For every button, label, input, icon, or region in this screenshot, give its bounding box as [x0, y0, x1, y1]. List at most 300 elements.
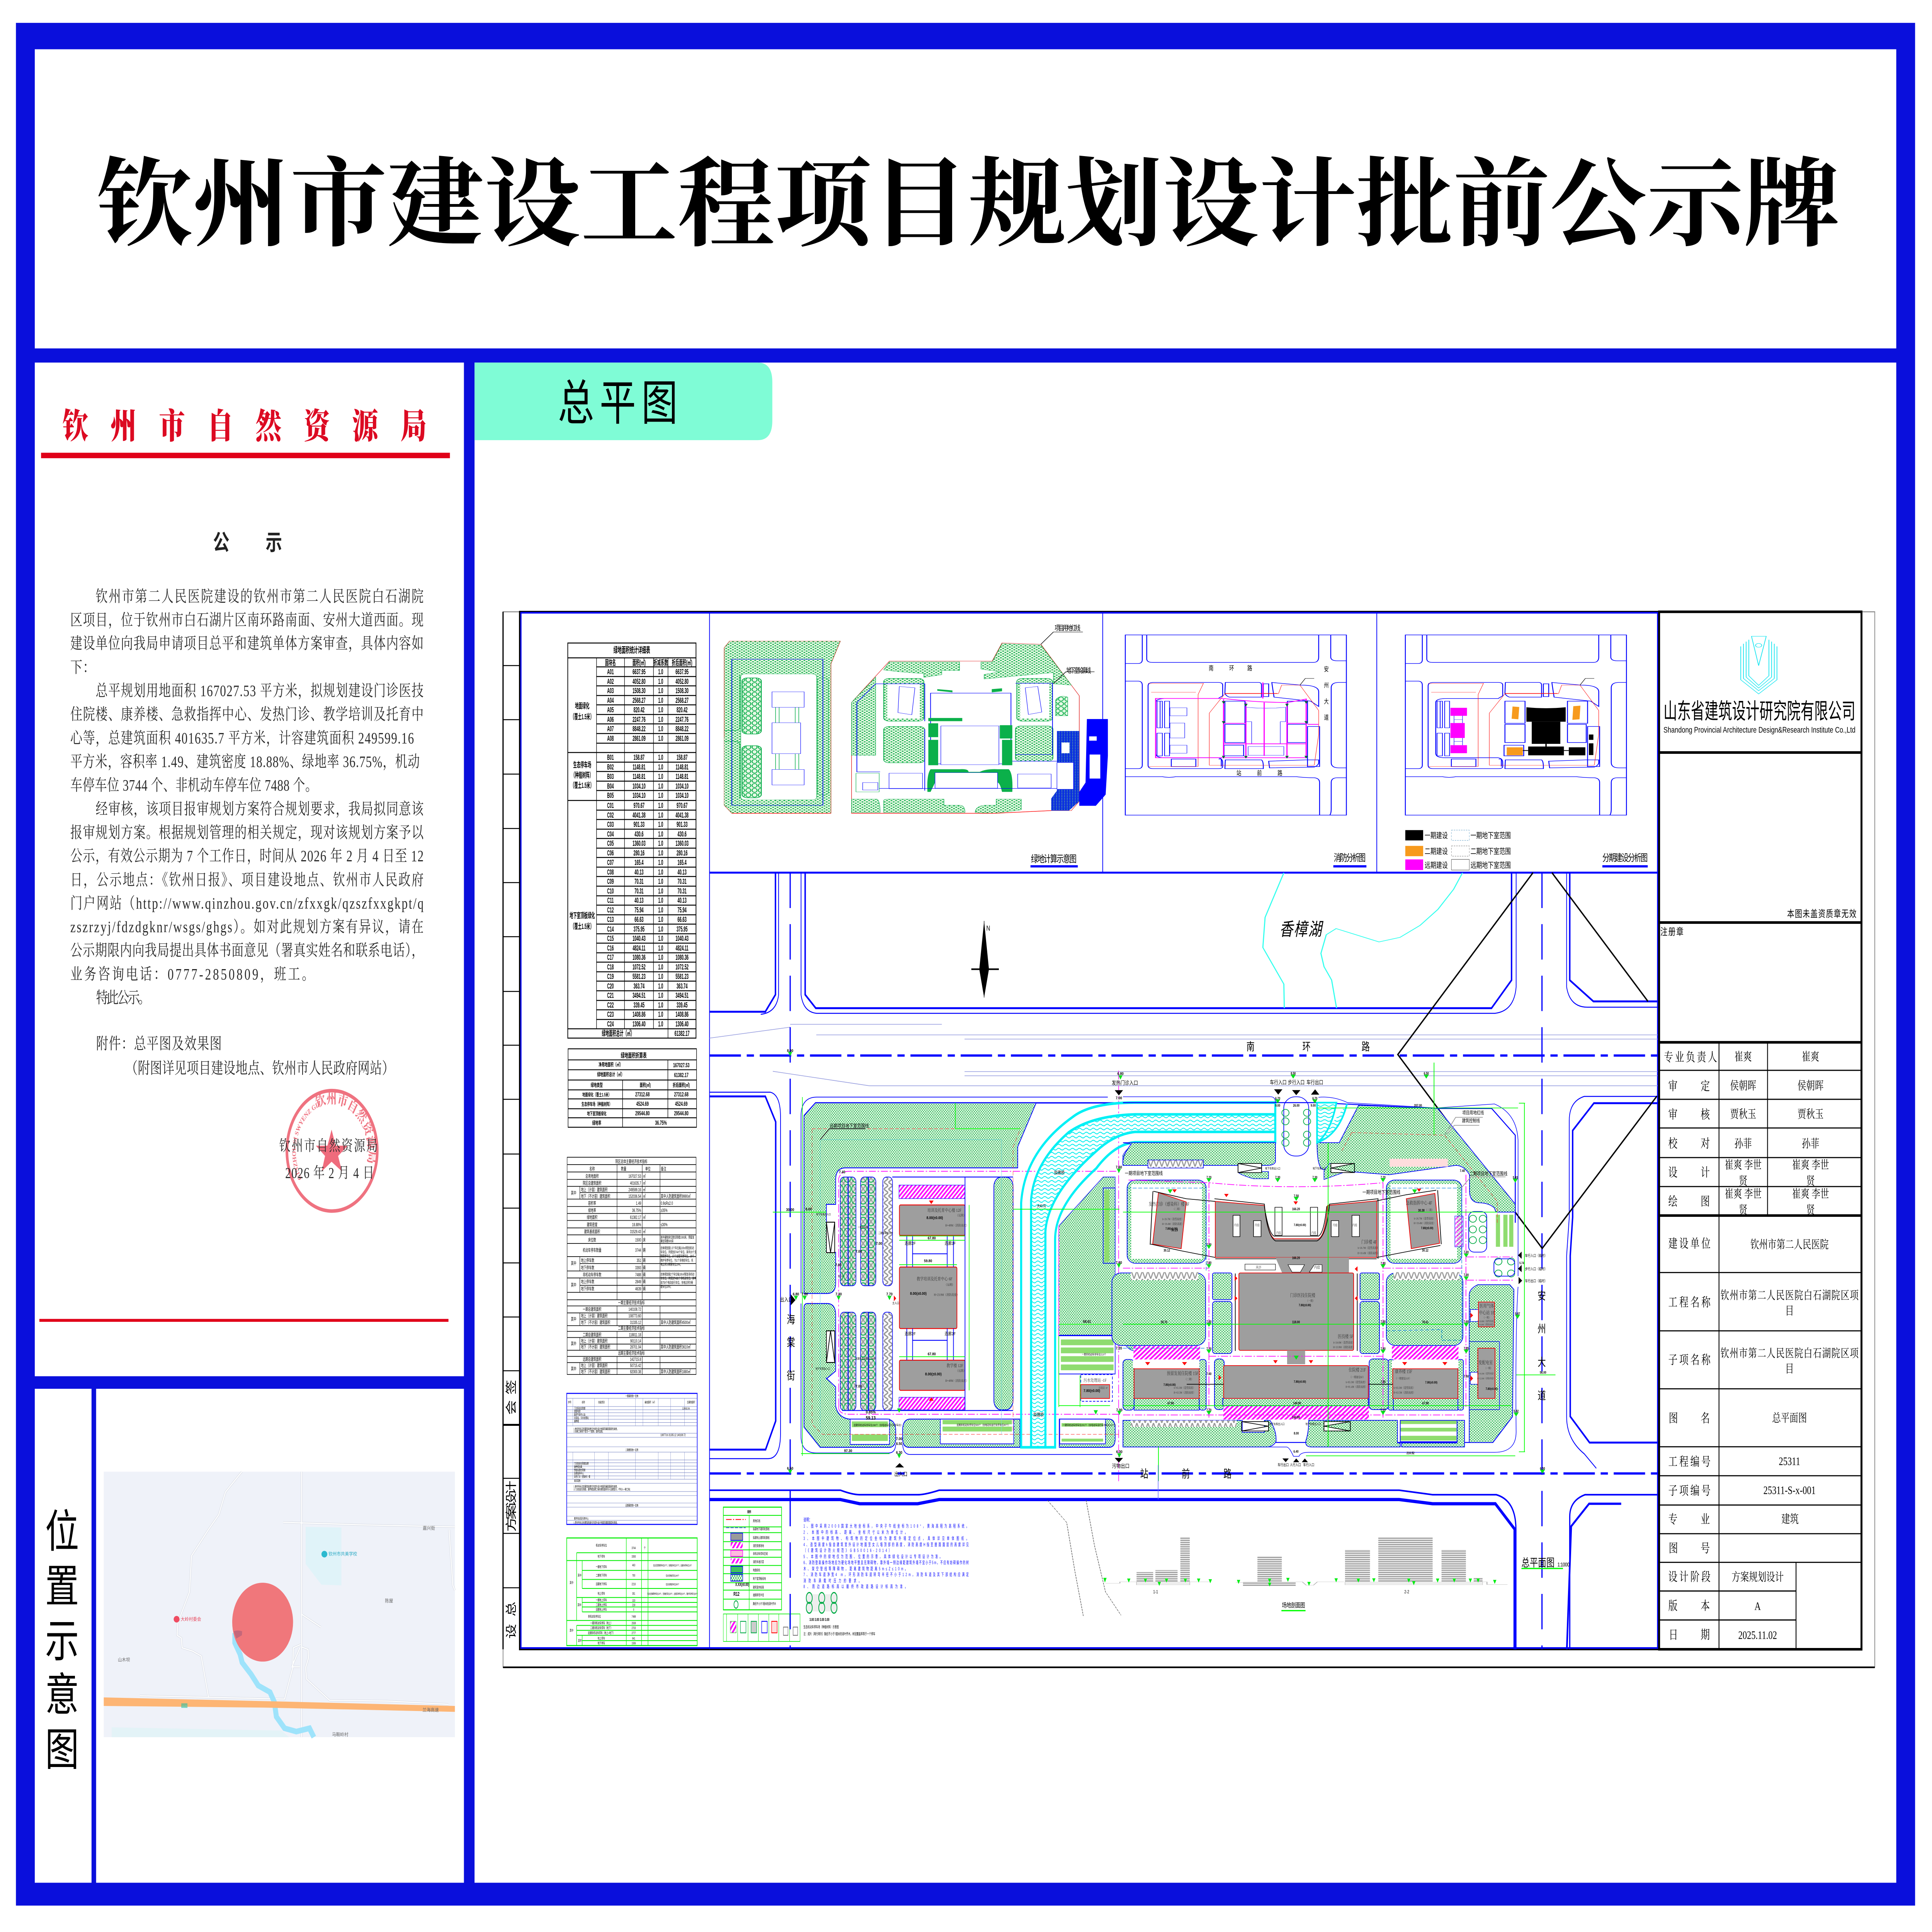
building: substation	[1478, 1348, 1495, 1398]
elevations: 7.80(±0.00)	[1083, 1389, 1100, 1393]
corridors	[842, 1177, 1013, 1410]
elevation marks east: 166.20	[1292, 1256, 1300, 1260]
entrance labels east: 车行入口	[1270, 1079, 1287, 1086]
table: technical indicators: 其中	[571, 1316, 576, 1322]
site plan: east half: 7.80(±0.00)	[1294, 1223, 1306, 1227]
plan labels: fire and phasing: 前	[1257, 770, 1262, 777]
table: technical indicators: ㎡	[643, 1214, 646, 1220]
table: green area detail: 1072.52	[633, 963, 646, 971]
title block: 贤	[1739, 1175, 1748, 1187]
section elevation marks	[1103, 1578, 1497, 1587]
phasing plan base	[1405, 635, 1626, 815]
green dimension lines	[1123, 1063, 1556, 1481]
table: green area detail: 1.0	[658, 801, 663, 810]
table: technical indicators: 31529.43	[630, 1230, 641, 1235]
table: green area detail: C17	[607, 954, 614, 962]
notes	[803, 1517, 969, 1590]
eco parking diagram: 3.00 3.00 3.00 3.00	[810, 1617, 830, 1622]
building labels east: H=63.5M（消防高度）	[1393, 1391, 1415, 1395]
building labels: 污水处理站 -1F	[1083, 1378, 1107, 1383]
table: green area conversion: 生态停车场（种植树阵）	[582, 1101, 612, 1107]
table: green area detail: 3494.51	[633, 992, 646, 1000]
table: parking: 7488	[632, 1615, 636, 1619]
building labels east: H=10.8M（造型高度）	[1477, 1320, 1495, 1323]
table: green area detail: 70.31	[677, 878, 687, 886]
map labels: 嘉兴街	[423, 1526, 435, 1531]
substation yard outline	[1469, 1342, 1500, 1410]
elevation marks east: 7.30	[1312, 1175, 1318, 1179]
building labels east: （二期）	[1185, 1377, 1193, 1381]
table: green area detail: C21	[607, 992, 614, 1000]
table: parking: 一期地上停车	[596, 1598, 607, 1602]
table: green area detail: 1.0	[658, 1020, 663, 1029]
registration stamp label: 注册章	[1660, 926, 1684, 937]
north arrow	[971, 921, 999, 998]
dashed stream lines	[1047, 1500, 1121, 1616]
table: parking: 1936	[632, 1642, 636, 1645]
entrance labels east: 人行入口	[1290, 1463, 1301, 1467]
elevation marks east: 7.50	[1381, 1380, 1386, 1384]
building labels east: 中心站 1F	[1479, 1310, 1495, 1316]
elevations: 7.00	[876, 1242, 882, 1246]
table: green area conversion: 61382.17	[674, 1071, 689, 1078]
plan caption: green calc	[1031, 624, 1091, 867]
table: green area detail: 1148.81	[633, 763, 645, 772]
blue basement line	[1123, 1188, 1462, 1348]
table: green area detail: C05	[607, 840, 614, 848]
site plan: west half: 出入口	[838, 1274, 844, 1278]
table: technical indicators: 167027.53	[629, 1174, 641, 1179]
table: green area detail: 375.95	[634, 925, 645, 934]
table: technical indicators: 61382.17	[630, 1215, 641, 1220]
notice body text: zszrzyj/fdzdgknr/wsgs/ghgs）。如对此规划方案有异议，请在	[70, 918, 423, 936]
building: teaching block	[900, 1360, 965, 1390]
building labels east: （一期）	[1485, 1366, 1492, 1370]
table: technical indicators: 其中	[571, 1260, 576, 1266]
elevations	[786, 1049, 1124, 1471]
table: green area detail: A06	[607, 716, 614, 724]
notice body text: 钦州市第二人民医院建设的钦州市第二人民医院白石湖院	[96, 587, 423, 605]
elevations: 7.40	[839, 1170, 845, 1175]
entrances and labels: 拟建桥	[1033, 1412, 1044, 1418]
table: green area detail: 1034.10	[675, 791, 689, 800]
table: green area detail: 970.67	[677, 801, 687, 810]
entrance labels east: 一期项目地下室范围线	[1125, 1170, 1163, 1176]
road names: 路	[1223, 1468, 1232, 1480]
road names: 路	[1362, 1041, 1370, 1053]
table: green area detail: C14	[607, 925, 614, 934]
elevations: 58.61	[1083, 1320, 1091, 1324]
building labels east: 内庭	[1333, 1223, 1338, 1227]
notice body text: 总平规划用地面积 167027.53 平方米，拟规划建设门诊医技	[96, 682, 423, 700]
elevation marks east: 118.00	[1292, 1320, 1300, 1324]
table: green area detail: C10	[607, 887, 614, 896]
table: green area detail: 165.4	[677, 859, 687, 867]
site plan: west half: 远期非机动车停车位288个（含电动车自行车停车位）	[854, 1423, 903, 1427]
table: green area detail: 1.0	[658, 992, 663, 1000]
table: technical indicators: 249599.16	[629, 1187, 641, 1193]
entrance labels east: 车行出口	[1278, 1463, 1289, 1467]
table: parking: 其中	[578, 1639, 582, 1643]
building: gas station	[1478, 1302, 1495, 1327]
table: green area detail: A05	[607, 706, 614, 714]
building labels east: 急救指挥中心 4F	[1406, 1200, 1432, 1206]
table: technical indicators: 401635.7	[630, 1181, 641, 1186]
table: green area detail: 1034.10	[633, 791, 646, 800]
company logo	[1741, 636, 1777, 694]
title block: 贤	[1806, 1175, 1815, 1187]
table: technical indicators: 床位数	[588, 1236, 596, 1243]
table: green area detail: A04	[607, 697, 614, 705]
table: green area conversion: 地下室顶板绿化	[587, 1111, 607, 1117]
elevation marks east: 7.00	[1464, 1320, 1469, 1324]
elevation marks east: 78.61	[1422, 1320, 1429, 1324]
building labels east: 住院楼 21F	[1349, 1367, 1366, 1373]
building labels east: H=81.4M（消防高度）	[1345, 1385, 1367, 1389]
table: technical indicators: 床	[643, 1236, 646, 1243]
table: technical indicators: 地下（不计容）建筑面积	[581, 1344, 610, 1350]
entrances and labels: 远期项目地下室范围线	[830, 1123, 869, 1129]
site plan: west half: 远期非机动车停车位583个（含电动车自行车停车位80个）	[957, 1423, 1010, 1427]
table: green area detail: A07	[607, 725, 614, 733]
sign-off table text: 工程名称	[1668, 1296, 1711, 1310]
table: technical indicators: 其中	[571, 1282, 576, 1288]
notice body text: （附图详见项目建设地点、钦州市人民政府网站）	[126, 1059, 394, 1077]
site plan: west half: 一期非机动车停车位291个（含电动车自行车停车位147个）	[1063, 1423, 1117, 1427]
notes: 3、本图中建筑物、构筑物的定位坐标为建筑外墙定位点，具体详见单体图纸。	[803, 1536, 969, 1541]
table: green area detail: 地下室顶板绿化	[570, 911, 595, 920]
notice body text: 公示，有效公示期为 7 个工作日，时间从 2026 年 2 月 4 日至 12	[70, 847, 423, 865]
table: green area conversion: 27312.68	[635, 1091, 650, 1098]
site plan: east half: 7.80(±0.00)	[1294, 1379, 1306, 1384]
plan caption: green calc: 绿地计算示意图	[1031, 854, 1077, 864]
table: green area detail: 820.42	[634, 706, 645, 714]
table: technical indicators: 辆	[643, 1257, 646, 1264]
table: green area detail: C16	[607, 944, 614, 952]
building: reserved ward	[1134, 1369, 1199, 1398]
road names: 南	[1247, 1041, 1255, 1053]
table: parking: 2777	[632, 1632, 636, 1635]
building labels: 教学楼 12F	[947, 1363, 963, 1368]
road names: 前	[1182, 1468, 1190, 1480]
elevation marks east: 207.00	[1414, 1104, 1422, 1107]
building labels east: h=65.5M（造型高度）	[1394, 1386, 1415, 1389]
table: green area detail: 1.0	[658, 697, 663, 705]
table: green area detail: 970.67	[634, 801, 645, 810]
building labels east: 变配电室	[1478, 1359, 1493, 1366]
table: technical indicators: 其中人防建筑面积3610㎡	[661, 1344, 690, 1350]
table: technical indicators: 140108.72	[629, 1307, 641, 1312]
plan: green area calculation	[724, 632, 1108, 813]
table: technical indicators: 其中人防建筑面积4500㎡	[661, 1319, 690, 1325]
road names: 棠	[787, 1337, 795, 1349]
elevations: 0.85%	[866, 1410, 876, 1415]
site plan: west half: 一期非机动车停车位213个	[1082, 1353, 1106, 1356]
table: parking: 远期非机动车停车（地上+地下）	[588, 1631, 615, 1635]
elevations: 6.30	[1116, 1450, 1122, 1454]
river	[235, 1633, 314, 1737]
table: green area detail: 2568.27	[633, 697, 646, 705]
table: green area detail: 1.0	[658, 868, 663, 876]
table: parking: 个	[644, 1546, 646, 1550]
location map	[104, 1472, 455, 1737]
table: technical indicators: 4639	[635, 1286, 641, 1292]
project site marker	[232, 1583, 293, 1662]
table: green area detail: 6637.95	[633, 668, 646, 676]
elevations: 7.00	[896, 1437, 902, 1441]
elevations: 6.30	[896, 1451, 902, 1455]
table: technical indicators: 2849	[635, 1279, 641, 1285]
table: building list: 序号	[568, 1400, 571, 1404]
table: building list: 1.表中所标注的建筑高度均为室外设计地面至屋面面层的高度。	[574, 1485, 619, 1488]
site plan: east half: 7.80(±0.00)	[1299, 1303, 1311, 1307]
table: parking: 远期地上停车	[596, 1607, 607, 1612]
table: green area detail: C03	[607, 820, 614, 829]
building labels east: 发热门诊（感染科）楼 4F	[1149, 1201, 1189, 1207]
table: green area detail: 339.45	[634, 1001, 645, 1010]
table: green area detail: 1080.36	[675, 954, 689, 962]
elevations: 8.00	[787, 1049, 793, 1053]
table: green area detail: B01	[607, 753, 614, 762]
table: technical indicators: 辆	[643, 1247, 646, 1253]
table: parking	[567, 1538, 698, 1646]
table: green area detail: 8848.22	[675, 725, 689, 733]
table: building list: 急救指挥中心	[574, 1471, 584, 1475]
table: technical indicators: ≥35%	[661, 1208, 668, 1213]
table: technical indicators: 辆	[643, 1286, 646, 1292]
sign-off strip	[505, 1380, 518, 1639]
notice body text: 建设单位向我局申请项目总平和建筑单体方案审查，具体内容如	[70, 634, 423, 652]
section middle	[1236, 1556, 1344, 1586]
table: green area detail: C20	[607, 982, 614, 990]
table: parking: 远期地下停车	[596, 1582, 607, 1586]
entrances and labels: 污物出口	[1112, 1463, 1129, 1469]
map labels: G75	[182, 1704, 187, 1708]
table: green area detail: 430.6	[634, 830, 643, 838]
green: north band	[1123, 1143, 1276, 1165]
elevations: 7.00	[801, 1292, 808, 1297]
date: 2026 年 2 月 4 日	[285, 1165, 374, 1181]
table: building list	[567, 1393, 697, 1524]
table: technical indicators: 二期总建筑面积	[583, 1332, 601, 1338]
sign-off table text: 专业	[1668, 1512, 1710, 1526]
table: green area detail: 280.16	[634, 849, 645, 857]
park area	[112, 1727, 289, 1737]
elevation marks east: 7.20	[1381, 1175, 1386, 1179]
plan labels: fire and phasing: 环	[1229, 665, 1234, 672]
elevations: 7.60	[1116, 1165, 1122, 1170]
table: technical indicators: ㎡	[643, 1173, 646, 1179]
table: green area detail: 1.0	[658, 1010, 663, 1019]
section 2-2	[1345, 1537, 1507, 1585]
building labels east: H=16.5M（造型高度）	[1477, 1372, 1495, 1375]
notice body text: 区项目，位于钦州市白石湖片区南环路南面、安州大道西面。现	[70, 611, 423, 629]
table: parking: 3744	[632, 1547, 636, 1550]
table: green area detail: B03	[607, 772, 614, 781]
table: green area detail: （覆土1.5米）	[571, 923, 594, 931]
green: north east	[1317, 1105, 1515, 1212]
table: green area detail: C01	[607, 801, 614, 810]
elevations: 8.00(±0.00)	[910, 1291, 927, 1296]
table: green area detail: B02	[607, 763, 614, 772]
legend: 用地红线	[753, 1519, 760, 1523]
plan labels: fire and phasing: 路	[1277, 770, 1282, 777]
table: green area detail: 1148.81	[676, 772, 689, 781]
table: green area detail: 绿地面积总计（㎡）	[602, 1029, 634, 1038]
elevation marks east: 8.00	[1294, 1431, 1299, 1435]
table: building list: 门诊医技住院楼加建	[574, 1462, 588, 1465]
elevation marks east: 26.00	[1293, 1104, 1300, 1107]
sign-off table grid	[1659, 1043, 1861, 1649]
table: parking: 2008	[632, 1622, 636, 1625]
title block: 建筑	[1781, 1513, 1799, 1526]
table: technical indicators: 地下（不计容）建筑面积	[581, 1193, 610, 1199]
table: parking: 包含充电桩车位140个	[666, 1574, 679, 1578]
table: green area detail: C24	[607, 1020, 614, 1029]
drawing sheet	[503, 612, 1875, 1667]
table: technical indicators: 地下停车数	[581, 1265, 594, 1271]
entrance labels east: 二期项目地下室范围线	[1469, 1171, 1507, 1177]
site plan: west half: 一期停车位	[858, 1226, 868, 1229]
red rule	[41, 453, 450, 458]
building labels: H=49M（消防高度）	[945, 1378, 969, 1383]
table: green area detail: 1508.30	[633, 687, 646, 695]
entrance labels east: 车行入口	[1303, 1463, 1314, 1467]
elevations: 59.13	[866, 1416, 876, 1421]
title block: 崔爽 李世	[1725, 1158, 1762, 1172]
table: green area detail: 901.33	[634, 820, 645, 829]
validity note: 本图未盖资质章无效	[1787, 908, 1856, 919]
building labels east: （一期建设11F）	[1395, 1376, 1411, 1380]
table: parking: 包含无障碍停车位37个；充电桩车位207个；出租车停车位18个	[653, 1563, 692, 1567]
table: green area conversion: 绿地类型	[591, 1082, 603, 1088]
notice body text: 日，公示地点：《钦州日报》、项目建设地点、钦州市人民政府	[70, 871, 423, 889]
table: green area detail: 2861.09	[675, 735, 689, 743]
road names: 大	[1537, 1356, 1546, 1369]
table: green area detail: 1034.10	[675, 782, 689, 791]
table: technical indicators: 辆	[643, 1279, 646, 1285]
building labels east: 门诊楼 4F	[1361, 1239, 1377, 1245]
table: parking: 二期非机动车停车（地下）	[590, 1626, 612, 1630]
elevation marks east: 7.50	[1294, 1194, 1299, 1198]
phasing legend: 二期建设	[1425, 847, 1448, 856]
sign-off table text: 设计	[1668, 1166, 1710, 1180]
table: green area conversion: 4524.69	[636, 1100, 649, 1107]
entrance labels east	[1125, 1079, 1547, 1467]
building labels east: 内庭	[1314, 1265, 1320, 1270]
map labels: 兰海高速	[422, 1707, 439, 1713]
elevation marks east: 6.70	[1312, 1096, 1318, 1100]
sign-off table text: 图号	[1669, 1542, 1710, 1555]
table: technical indicators: 142715.8	[630, 1357, 641, 1362]
basement red line	[812, 1129, 1119, 1434]
title block: 侯朝晖	[1730, 1079, 1756, 1092]
table: technical indicators: 建筑基底面积	[584, 1228, 600, 1235]
table: green area detail: A01	[607, 668, 614, 676]
building labels: 垃圾站 1F	[1099, 1386, 1108, 1389]
table: green area detail: 1.0	[658, 849, 663, 857]
table: technical indicators: 地上（计容）建筑面积	[581, 1187, 607, 1193]
white cut-outs around buildings	[1131, 1184, 1479, 1384]
elevations: 7.00	[1116, 1408, 1122, 1413]
gray parking strips	[1131, 1159, 1459, 1427]
site plan: west half: 主入口	[892, 1301, 899, 1305]
link block voids	[1245, 1264, 1322, 1272]
site boundary east	[1123, 1103, 1515, 1442]
road names: 环	[1303, 1041, 1311, 1053]
table: green area detail: 40.13	[677, 868, 687, 876]
elevation marks east: 67.80	[1167, 1401, 1174, 1405]
sign-off table text: 设计阶段	[1668, 1570, 1711, 1584]
table: green area detail: C08	[607, 868, 614, 876]
title block: 侯朝晖	[1798, 1079, 1823, 1092]
location label: 位	[45, 1507, 79, 1557]
elevations: 7.00	[835, 1263, 842, 1267]
title block: 目	[1785, 1304, 1794, 1317]
table: green area conversion: 面积(㎡)	[640, 1082, 651, 1088]
notice body text: 心等，总建筑面积 401635.7 平方米，计容建筑面积 249599.16	[70, 729, 414, 747]
site plan: west half: 二期停车位24个	[878, 1231, 893, 1235]
elevation marks east: 140.80	[1292, 1415, 1300, 1419]
notes: 4、造型高度h指自建筑室外设计地面至女儿墙顶部的高度，消防高度H指至屋面面层的高度详见	[803, 1542, 969, 1548]
table: technical indicators: 地上（计容）建筑面积	[581, 1313, 607, 1319]
building: training and childcare	[900, 1205, 965, 1235]
table: technical indicators: 总用地面积	[585, 1173, 599, 1179]
table: green area detail: 1.0	[658, 944, 663, 952]
table: technical indicators: 118811.18	[629, 1332, 641, 1338]
east parking	[1400, 1215, 1513, 1440]
phasing legend: 远期地下室范围	[1471, 861, 1511, 869]
elevation marks east: 210.52	[1406, 1451, 1415, 1455]
table: parking: 机动车停车位	[596, 1543, 607, 1548]
table: green area detail: 75.94	[634, 906, 644, 915]
table: green area detail: 生态停车场	[573, 760, 591, 769]
table: green area detail: 2247.76	[675, 716, 689, 724]
sign-off table text: 日期	[1669, 1628, 1710, 1642]
building labels: 培训及托育中心楼 12F	[927, 1208, 961, 1213]
table: green area detail: 1.0	[658, 1001, 663, 1010]
elevations: 67.80	[928, 1236, 936, 1241]
legend: 拟建地上建筑轮廓线	[753, 1536, 769, 1540]
notice body text: 附件：总平图及效果图	[96, 1035, 222, 1053]
table: green area detail: 1360.03	[675, 840, 689, 848]
plan: fire and phasing	[1125, 635, 1626, 815]
table: technical indicators: 18.88%	[632, 1223, 641, 1228]
entrances and labels	[780, 1080, 1138, 1477]
table: parking: 其中	[578, 1573, 582, 1578]
elevations: 7.20	[1116, 1346, 1122, 1351]
table: technical indicators: 其中	[571, 1366, 576, 1372]
table: building list: 名称	[582, 1400, 585, 1404]
table: parking: 地下停车	[598, 1554, 605, 1559]
table: green area detail: 1.0	[658, 896, 663, 905]
school grounds	[306, 1527, 341, 1585]
title block: 总平面图	[1772, 1412, 1807, 1425]
table: technical indicators: 辆	[643, 1265, 646, 1271]
building labels east	[1149, 1200, 1495, 1395]
location label: 示	[45, 1616, 79, 1666]
plan title: 1:1000	[1558, 1561, 1570, 1568]
table: technical indicators: 1500	[635, 1238, 641, 1243]
sign-off table text: 校对	[1668, 1137, 1710, 1151]
road names: 站	[1140, 1468, 1148, 1480]
cyan canal end	[1317, 1103, 1347, 1143]
table: green area detail: C04	[607, 830, 614, 838]
location label: 图	[45, 1725, 79, 1775]
plan labels: fire and phasing: 路	[1247, 665, 1252, 672]
plan labels: fire and phasing: 分期建设分析图	[1602, 852, 1648, 863]
table: green area conversion: 地面绿化（覆土1.5米）	[582, 1092, 611, 1098]
